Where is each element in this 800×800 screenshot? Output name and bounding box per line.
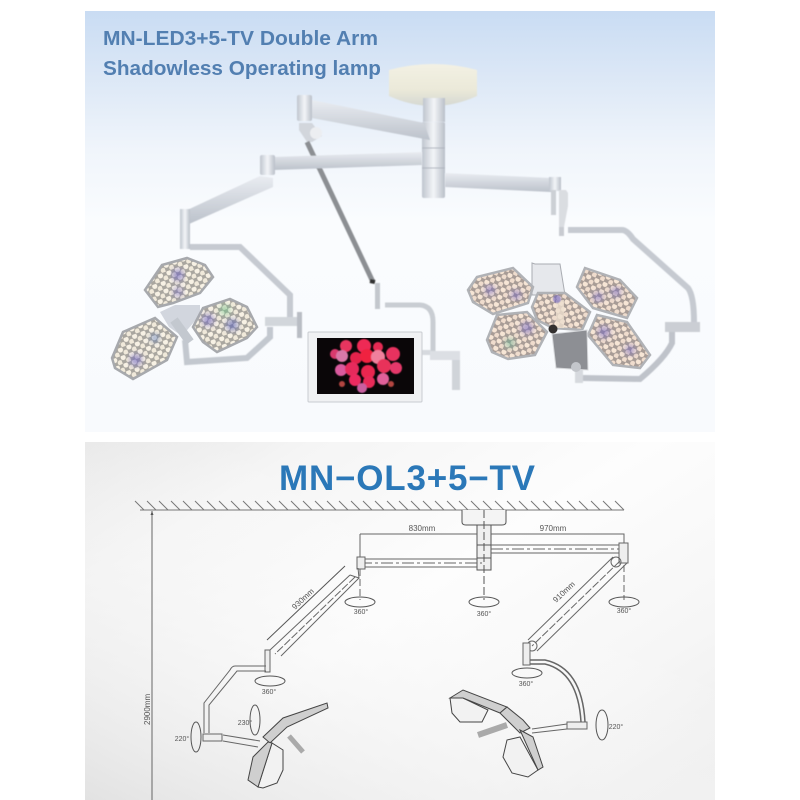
drawing: ceiling mount and pillar — [462, 510, 506, 600]
lamp module right — [193, 299, 257, 352]
heading: product name: MN-LED3+5-TV Double Arm — [103, 27, 378, 50]
drawing: left angled arm — [265, 566, 359, 672]
ceiling canopy — [389, 64, 477, 122]
mount knob — [571, 362, 581, 372]
drawing: right curved arm — [530, 660, 587, 733]
dimension: 910mm: 910mm — [551, 579, 577, 604]
drawing: left spring arm — [203, 666, 266, 747]
lamp module bottom — [112, 318, 177, 379]
left lamp head — [112, 258, 257, 379]
rotation labels: 230° — [238, 719, 252, 727]
drawing: left horizontal arm — [357, 557, 482, 600]
ceiling hatch line — [135, 501, 624, 510]
rotation labels — [175, 607, 631, 743]
camera knob — [548, 324, 558, 334]
rotation labels: 360° — [354, 608, 368, 616]
drawing: right angled arm — [523, 557, 627, 665]
height dimension: 2900mm — [143, 694, 152, 725]
heading: product type: Shadowless Operating lamp — [103, 57, 381, 80]
lamp module top left — [468, 268, 533, 314]
left lamp suspension arm — [180, 152, 422, 362]
lamp module bottom left — [487, 312, 547, 359]
rotation labels: 220° — [175, 735, 189, 743]
control box — [552, 330, 588, 370]
drawing: left lamp side view — [248, 703, 328, 788]
upper monitor arm — [297, 95, 430, 282]
lamp module top right — [577, 268, 637, 318]
lamp module top — [145, 258, 213, 307]
drawing: right horizontal arm — [491, 543, 628, 600]
dimension: 970mm — [491, 524, 624, 543]
lamp stem — [174, 320, 190, 342]
dimension: 830mm — [360, 524, 477, 557]
top handle box — [532, 263, 565, 295]
dimension: 970mm: 970mm — [540, 524, 567, 533]
monitor with flower image — [308, 332, 422, 402]
right lamp head — [468, 263, 650, 372]
rotation labels: 360° — [262, 688, 276, 696]
dimension: 930mm: 930mm — [290, 586, 316, 611]
monitor bracket — [375, 283, 460, 390]
drawing: right lamp side view — [450, 690, 543, 777]
rotation labels: 360° — [617, 607, 631, 615]
lamp module center — [532, 293, 590, 330]
lamp module bottom right — [588, 315, 650, 368]
right lamp suspension arm — [445, 173, 700, 383]
rotation labels: 360° — [519, 680, 533, 688]
panel: product photo background — [85, 11, 715, 432]
rotation markers — [175, 597, 639, 752]
rotation labels: 360° — [477, 610, 491, 618]
rotation labels: 220° — [609, 723, 623, 731]
central pillar — [422, 122, 445, 198]
lamp hub — [160, 305, 200, 336]
dimension: 830mm: 830mm — [409, 524, 436, 533]
panel: technical drawing background — [85, 442, 715, 800]
heading: model number: MN−OL3+5−TV — [279, 459, 536, 498]
height dimension — [143, 511, 154, 800]
